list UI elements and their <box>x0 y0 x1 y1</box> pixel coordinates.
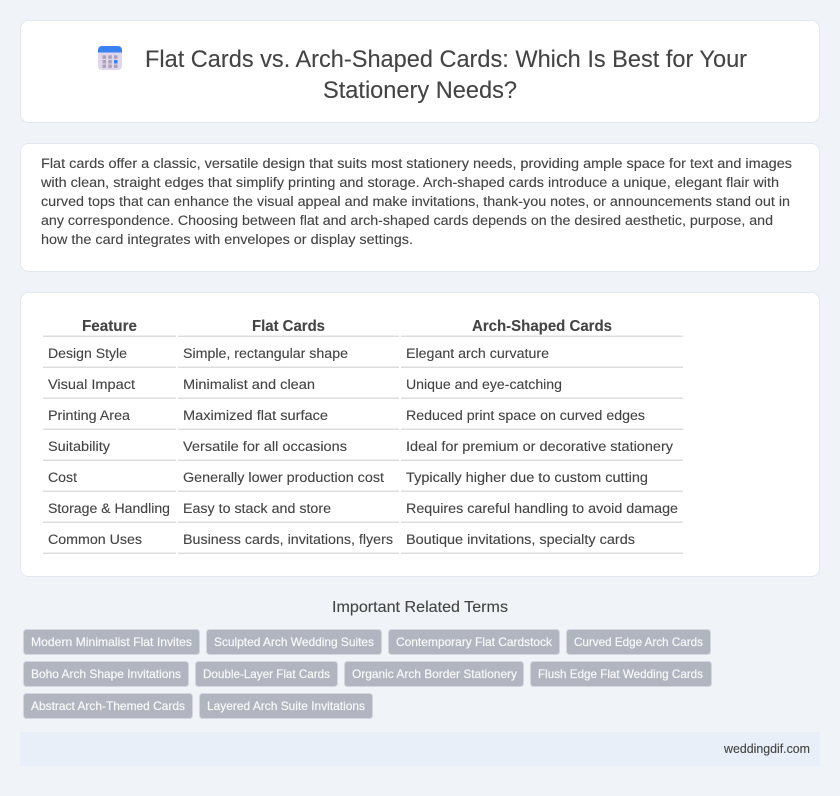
panel: comparison table <box>20 292 820 576</box>
row: visual impact <box>48 377 562 393</box>
table header: Arch-Shaped Cards <box>472 318 612 335</box>
row: printing area: Reduced print space on curved edges <box>406 408 645 424</box>
panel: header <box>20 20 820 122</box>
heading: related terms: Important Related Terms <box>332 599 508 616</box>
row: cost <box>48 470 648 486</box>
text block: introduction: Flat cards offer a classic, versatile design that suits most stationery needs, providing ample space for text and images <box>41 156 792 172</box>
related term tags: Double-Layer Flat Cards <box>203 667 330 681</box>
title: Stationery Needs? <box>323 77 517 104</box>
row: common uses: Boutique invitations, specialty cards <box>406 532 635 548</box>
related term tags <box>24 630 712 718</box>
related term tags: Flush Edge Flat Wedding Cards <box>538 667 703 681</box>
related term tags: Sculpted Arch Wedding Suites <box>214 635 374 649</box>
row: common uses: Business cards, invitations, flyers <box>183 532 393 548</box>
row: storage and handling <box>48 501 678 517</box>
related term tags: Abstract Arch-Themed Cards <box>31 699 185 713</box>
row: suitability: Suitability <box>48 439 111 455</box>
row: common uses: Common Uses <box>48 532 142 548</box>
row: suitability: Ideal for premium or decorative stationery <box>406 439 674 455</box>
row: storage and handling: Requires careful handling to avoid damage <box>406 501 678 517</box>
related term tags: Modern Minimalist Flat Invites <box>31 635 192 649</box>
icon: calendar <box>98 46 122 70</box>
table header <box>82 318 612 335</box>
text block: introduction: how the card integrates with envelopes or display settings. <box>41 232 413 248</box>
title: Flat Cards vs. Arch-Shaped Cards: Which Is Best for Your <box>145 46 747 73</box>
related term tags: Layered Arch Suite Invitations <box>207 699 365 713</box>
text block: introduction: any correspondence. Choosing between flat and arch-shaped cards depends on the desired aesthetic, purpose, and <box>41 213 773 229</box>
text block: introduction: curved tops that can enhance the visual appeal and make invitations, thank-you notes, or announcements stand out in <box>41 194 790 210</box>
row: cost: Typically higher due to custom cutting <box>406 470 648 486</box>
text block: introduction <box>40 156 792 248</box>
panel: introduction <box>20 144 820 272</box>
footer <box>20 732 820 766</box>
row: common uses <box>48 532 635 548</box>
row: visual impact: Unique and eye-catching <box>406 377 562 393</box>
row: suitability: Versatile for all occasions <box>183 439 347 455</box>
row: cost: Generally lower production cost <box>183 470 384 486</box>
row: cost: Cost <box>48 470 77 486</box>
footer: weddingdif.com <box>723 742 810 756</box>
row: storage and handling: Easy to stack and store <box>183 501 331 517</box>
text block: introduction: with clean, straight edges that simplify printing and storage. Arch-shaped cards introduce a unique, elegant flair with <box>40 175 779 191</box>
title <box>145 46 747 104</box>
row: printing area: Maximized flat surface <box>183 408 328 424</box>
related term tags: Organic Arch Border Stationery <box>352 667 517 681</box>
row: storage and handling: Storage & Handling <box>48 501 170 517</box>
row: printing area <box>48 408 645 424</box>
related term tags: Contemporary Flat Cardstock <box>396 635 553 649</box>
table header: Flat Cards <box>252 318 325 335</box>
related term tags: Boho Arch Shape Invitations <box>31 667 181 681</box>
row: visual impact: Minimalist and clean <box>183 377 315 393</box>
row: printing area: Printing Area <box>48 408 130 424</box>
row: design style: Simple, rectangular shape <box>183 346 348 362</box>
row: design style <box>48 346 549 362</box>
row: suitability <box>48 439 674 455</box>
row: design style: Elegant arch curvature <box>406 346 549 362</box>
row: visual impact: Visual Impact <box>48 377 135 393</box>
related term tags: Curved Edge Arch Cards <box>574 635 703 649</box>
row: design style: Design Style <box>48 346 127 362</box>
table header: Feature <box>82 318 137 335</box>
